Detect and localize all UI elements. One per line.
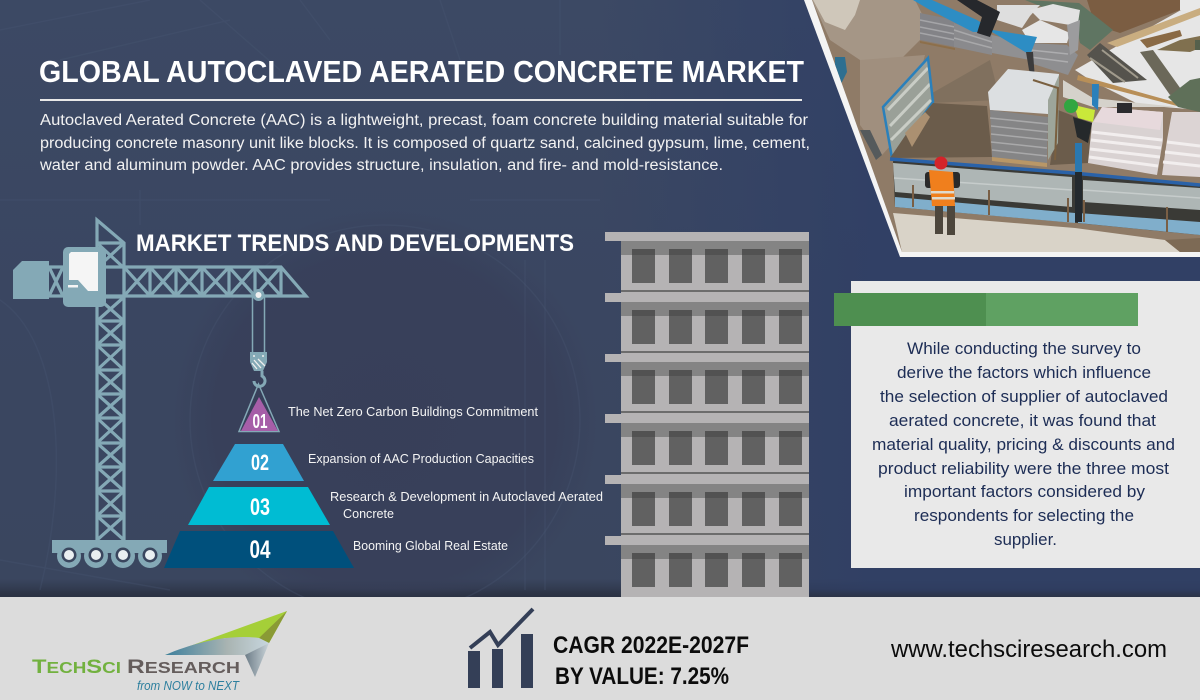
tier 03: 03 bbox=[250, 494, 270, 521]
logo: TechSci Research bbox=[32, 611, 287, 693]
deck bbox=[890, 103, 992, 158]
survey text: the selection of supplier of autoclaved bbox=[880, 387, 1168, 406]
survey text: aerated concrete, it was found that bbox=[889, 411, 1156, 430]
back pallets bbox=[920, 13, 955, 47]
icon: tower crane bbox=[13, 220, 306, 568]
CAGR text: CAGR 2022E-2027F bbox=[553, 632, 749, 659]
workers and bags bbox=[1088, 107, 1163, 175]
blue crane arm bbox=[913, 0, 1037, 55]
trend labels bbox=[288, 404, 603, 553]
title underline bbox=[40, 99, 802, 101]
tier 03 bbox=[188, 487, 330, 525]
green banner bbox=[834, 293, 1138, 326]
tier 01 bbox=[241, 397, 278, 433]
section heading: MARKET TRENDS AND DEVELOPMENTS bbox=[136, 230, 574, 257]
sling around tier 01 bbox=[239, 384, 279, 432]
trend labels: Research & Development in Autoclaved Aerated bbox=[330, 489, 603, 504]
trend labels: Booming Global Real Estate bbox=[353, 538, 508, 553]
centre pallet bbox=[988, 69, 1059, 114]
photo: workers unloading AAC pallets from a truck bbox=[800, 0, 1200, 257]
tier 01: 01 bbox=[252, 411, 268, 433]
tier 02: 02 bbox=[251, 450, 269, 475]
truck side bbox=[893, 160, 1200, 235]
intro paragraph: Autoclaved Aerated Concrete (AAC) is a lightweight, precast, foam concrete building material suitable for bbox=[40, 112, 808, 129]
survey text: product reliability were the three most bbox=[878, 459, 1169, 478]
survey text: While conducting the survey to bbox=[907, 339, 1141, 358]
footer band bbox=[0, 597, 1200, 700]
survey text bbox=[872, 339, 1175, 549]
CAGR text bbox=[553, 632, 749, 690]
right background bbox=[1087, 0, 1181, 33]
tier 02 bbox=[213, 444, 304, 481]
logo: TechSci Research: from NOW to NEXT bbox=[137, 678, 240, 693]
survey text: material quality, pricing & discounts and bbox=[872, 435, 1175, 454]
tier 04 bbox=[164, 531, 354, 568]
panel: survey findings bbox=[834, 281, 1200, 568]
intro paragraph: water and aluminum powder. AAC provides structure, insulation, and fire- and mold-resistance. bbox=[39, 157, 723, 174]
trend labels: The Net Zero Carbon Buildings Commitment bbox=[288, 404, 538, 419]
title: GLOBAL AUTOCLAVED AERATED CONCRETE MARKET bbox=[39, 54, 804, 89]
icon: growth chart bbox=[468, 609, 533, 688]
gate bbox=[884, 61, 932, 154]
icon: building bbox=[605, 232, 809, 597]
logo: TechSci Research: TECH SCI bbox=[32, 656, 121, 678]
survey text: important factors considered by bbox=[904, 482, 1146, 501]
trend labels: Expansion of AAC Production Capacities bbox=[308, 451, 534, 466]
pyramid list bbox=[164, 384, 354, 568]
intro paragraph bbox=[39, 112, 810, 174]
survey text: supplier. bbox=[994, 530, 1057, 549]
intro paragraph: producing concrete masonry unit like blocks. It is composed of quartz sand, calcined gypsum, lime, cement, bbox=[40, 135, 810, 152]
survey text: derive the factors which influence bbox=[897, 363, 1151, 382]
website: www.techsciresearch.com bbox=[890, 636, 1167, 663]
trend labels: Concrete bbox=[343, 506, 394, 521]
survey text: respondents for selecting the bbox=[914, 506, 1134, 525]
CAGR text: BY VALUE: 7.25% bbox=[555, 663, 729, 690]
tier 04: 04 bbox=[250, 536, 271, 564]
logo: TechSci Research: RESEARCH bbox=[127, 656, 240, 678]
